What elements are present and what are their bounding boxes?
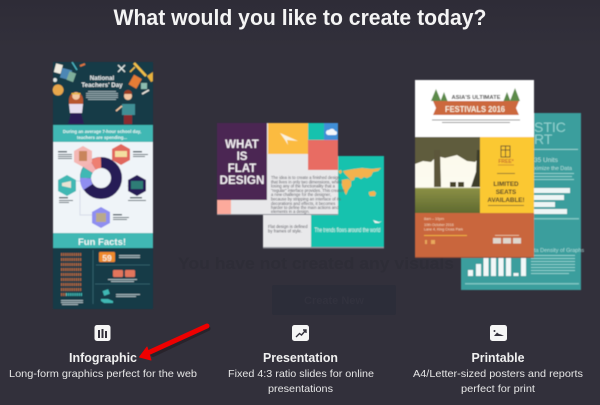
event details: [424, 217, 463, 232]
fact one lines: [119, 255, 140, 258]
description: infographic: Long-form graphics perfect for the web: [9, 368, 197, 380]
back poster: STIC: [534, 119, 566, 135]
hex labels: [58, 151, 148, 220]
cloud icon: [326, 129, 337, 135]
description: printable: perfect for print: [461, 383, 535, 395]
hex icons: [58, 144, 146, 228]
title: What would you like to create today?: [114, 5, 486, 30]
people pictogram grid: [61, 254, 82, 294]
icon: trend line: [292, 325, 309, 341]
teacher figures: [68, 90, 135, 124]
small plane: [373, 220, 382, 223]
slide tagline: The trends flows around the world: [314, 227, 381, 234]
slide body text: decorations and effects, it becomes: [271, 201, 335, 206]
slide body text: because by stripping an interface of its: [271, 196, 341, 202]
infographic intro lines: [86, 91, 118, 100]
panel: presentation thumbnails: [217, 123, 384, 248]
slide heading: [220, 139, 264, 187]
ghost create new button: [272, 285, 396, 315]
back poster: ta Density of Graphs: [534, 248, 584, 254]
heading: infographic: Infographic: [69, 351, 137, 365]
slide heading: WHAT: [225, 139, 259, 151]
social icons: [425, 240, 435, 244]
ghost message behind overlay: You have not created any visuals: [178, 254, 454, 273]
front slide: [217, 123, 345, 215]
teal band: [53, 125, 153, 142]
teal band text: During an average 7-hour school day,: [63, 129, 141, 134]
divider lines: [93, 250, 150, 304]
connector lines: [76, 160, 139, 215]
back poster: [461, 113, 584, 290]
photo: [415, 137, 480, 213]
limited seats text: AVAILABLE!: [487, 197, 525, 204]
slide body text: harder to define the main actions and: [271, 205, 339, 210]
description: presentation: presentations: [268, 383, 333, 395]
infographic heading: National: [90, 75, 114, 82]
link line: [424, 235, 467, 236]
ghost create new button: Create New: [304, 295, 364, 307]
number badge value: 59: [102, 253, 112, 263]
slide heading: DESIGN: [220, 175, 264, 187]
briefcases: [113, 270, 135, 277]
back poster: RT: [534, 131, 553, 147]
icon: landscape image: [490, 325, 507, 341]
intro lines: [432, 120, 520, 123]
description: printable: A4/Letter-sized posters and reports: [413, 368, 583, 380]
light chart panel: [53, 142, 153, 233]
fact two lines: [108, 279, 137, 282]
event details: Lane 4, King Cross Park: [424, 228, 463, 232]
option: printable: [413, 325, 583, 395]
paper plane icon: [280, 133, 298, 145]
back poster: ximize the Data: [534, 166, 573, 172]
icon: bar chart: [94, 325, 110, 341]
option: presentation: [228, 325, 374, 395]
arrow: red annotation pointing at Infographic: [140, 326, 208, 360]
number badge: [99, 252, 115, 262]
world map: [338, 168, 381, 196]
ribbon banner: [433, 101, 519, 115]
event details: 8am – 10pm: [424, 217, 444, 221]
slide body text: [271, 175, 345, 214]
option: infographic: [9, 325, 197, 380]
money hand icon: [101, 289, 113, 303]
limited seats text: SEATS: [496, 189, 516, 196]
heading: printable: Printable: [472, 351, 525, 365]
slide body text: The idea is to create a finished design: [271, 175, 341, 180]
description: presentation: [228, 368, 374, 395]
poster title: ASIA'S ULTIMATE: [452, 95, 501, 101]
paragraph lines: [531, 255, 575, 274]
panel: infographic thumbnail: [52, 62, 153, 309]
fun facts heading: Fun Facts!: [78, 237, 126, 248]
front poster: [415, 80, 534, 258]
description: printable: [413, 368, 583, 395]
slide body text: that lives in only two dimensions, whilst: [271, 179, 343, 184]
back slide: [263, 156, 384, 248]
free label: FREE*: [498, 159, 514, 165]
heading: presentation: Presentation: [263, 351, 338, 365]
event details: 10th October 2016: [424, 223, 454, 227]
panel: printable thumbnails: [415, 80, 584, 290]
yellow panel: [480, 137, 534, 213]
pictogram caption: [61, 300, 83, 305]
slide note: Flat design is defined: [268, 224, 308, 229]
slide body text: a new challenge for the designer,: [271, 192, 331, 197]
slide body text: "regular" interface provides. This creates: [271, 188, 345, 193]
gift icon: [501, 146, 510, 157]
slide body text: elements in a design.: [271, 209, 310, 214]
panel: infographic thumbnail: Teachers' Day: [81, 82, 123, 89]
fact three lines: [116, 294, 140, 297]
limited seats text: [487, 181, 525, 204]
orange footer: [415, 213, 534, 257]
infographic header illustrations: [52, 62, 153, 96]
slide body text: losing any of the functionality that a: [271, 184, 336, 189]
trees: [431, 88, 520, 101]
horizontal bars: [534, 188, 570, 214]
description: presentation: Fixed 4:3 ratio slides for online: [228, 368, 374, 380]
column chart: [468, 257, 526, 276]
limited seats text: LIMITED: [493, 181, 519, 188]
sponsor boxes: [493, 238, 521, 244]
back slide: by frames of style.: [268, 228, 302, 234]
fun facts band: [53, 233, 153, 248]
back poster: 35 Units: [534, 157, 559, 164]
ribbon text: FESTIVALS 2016: [445, 105, 506, 114]
panel: infographic thumbnail: teachers are spending...: [77, 135, 127, 140]
slide heading: FLAT: [228, 163, 256, 175]
donut chart: [85, 162, 116, 194]
slide heading: IS: [237, 151, 248, 163]
